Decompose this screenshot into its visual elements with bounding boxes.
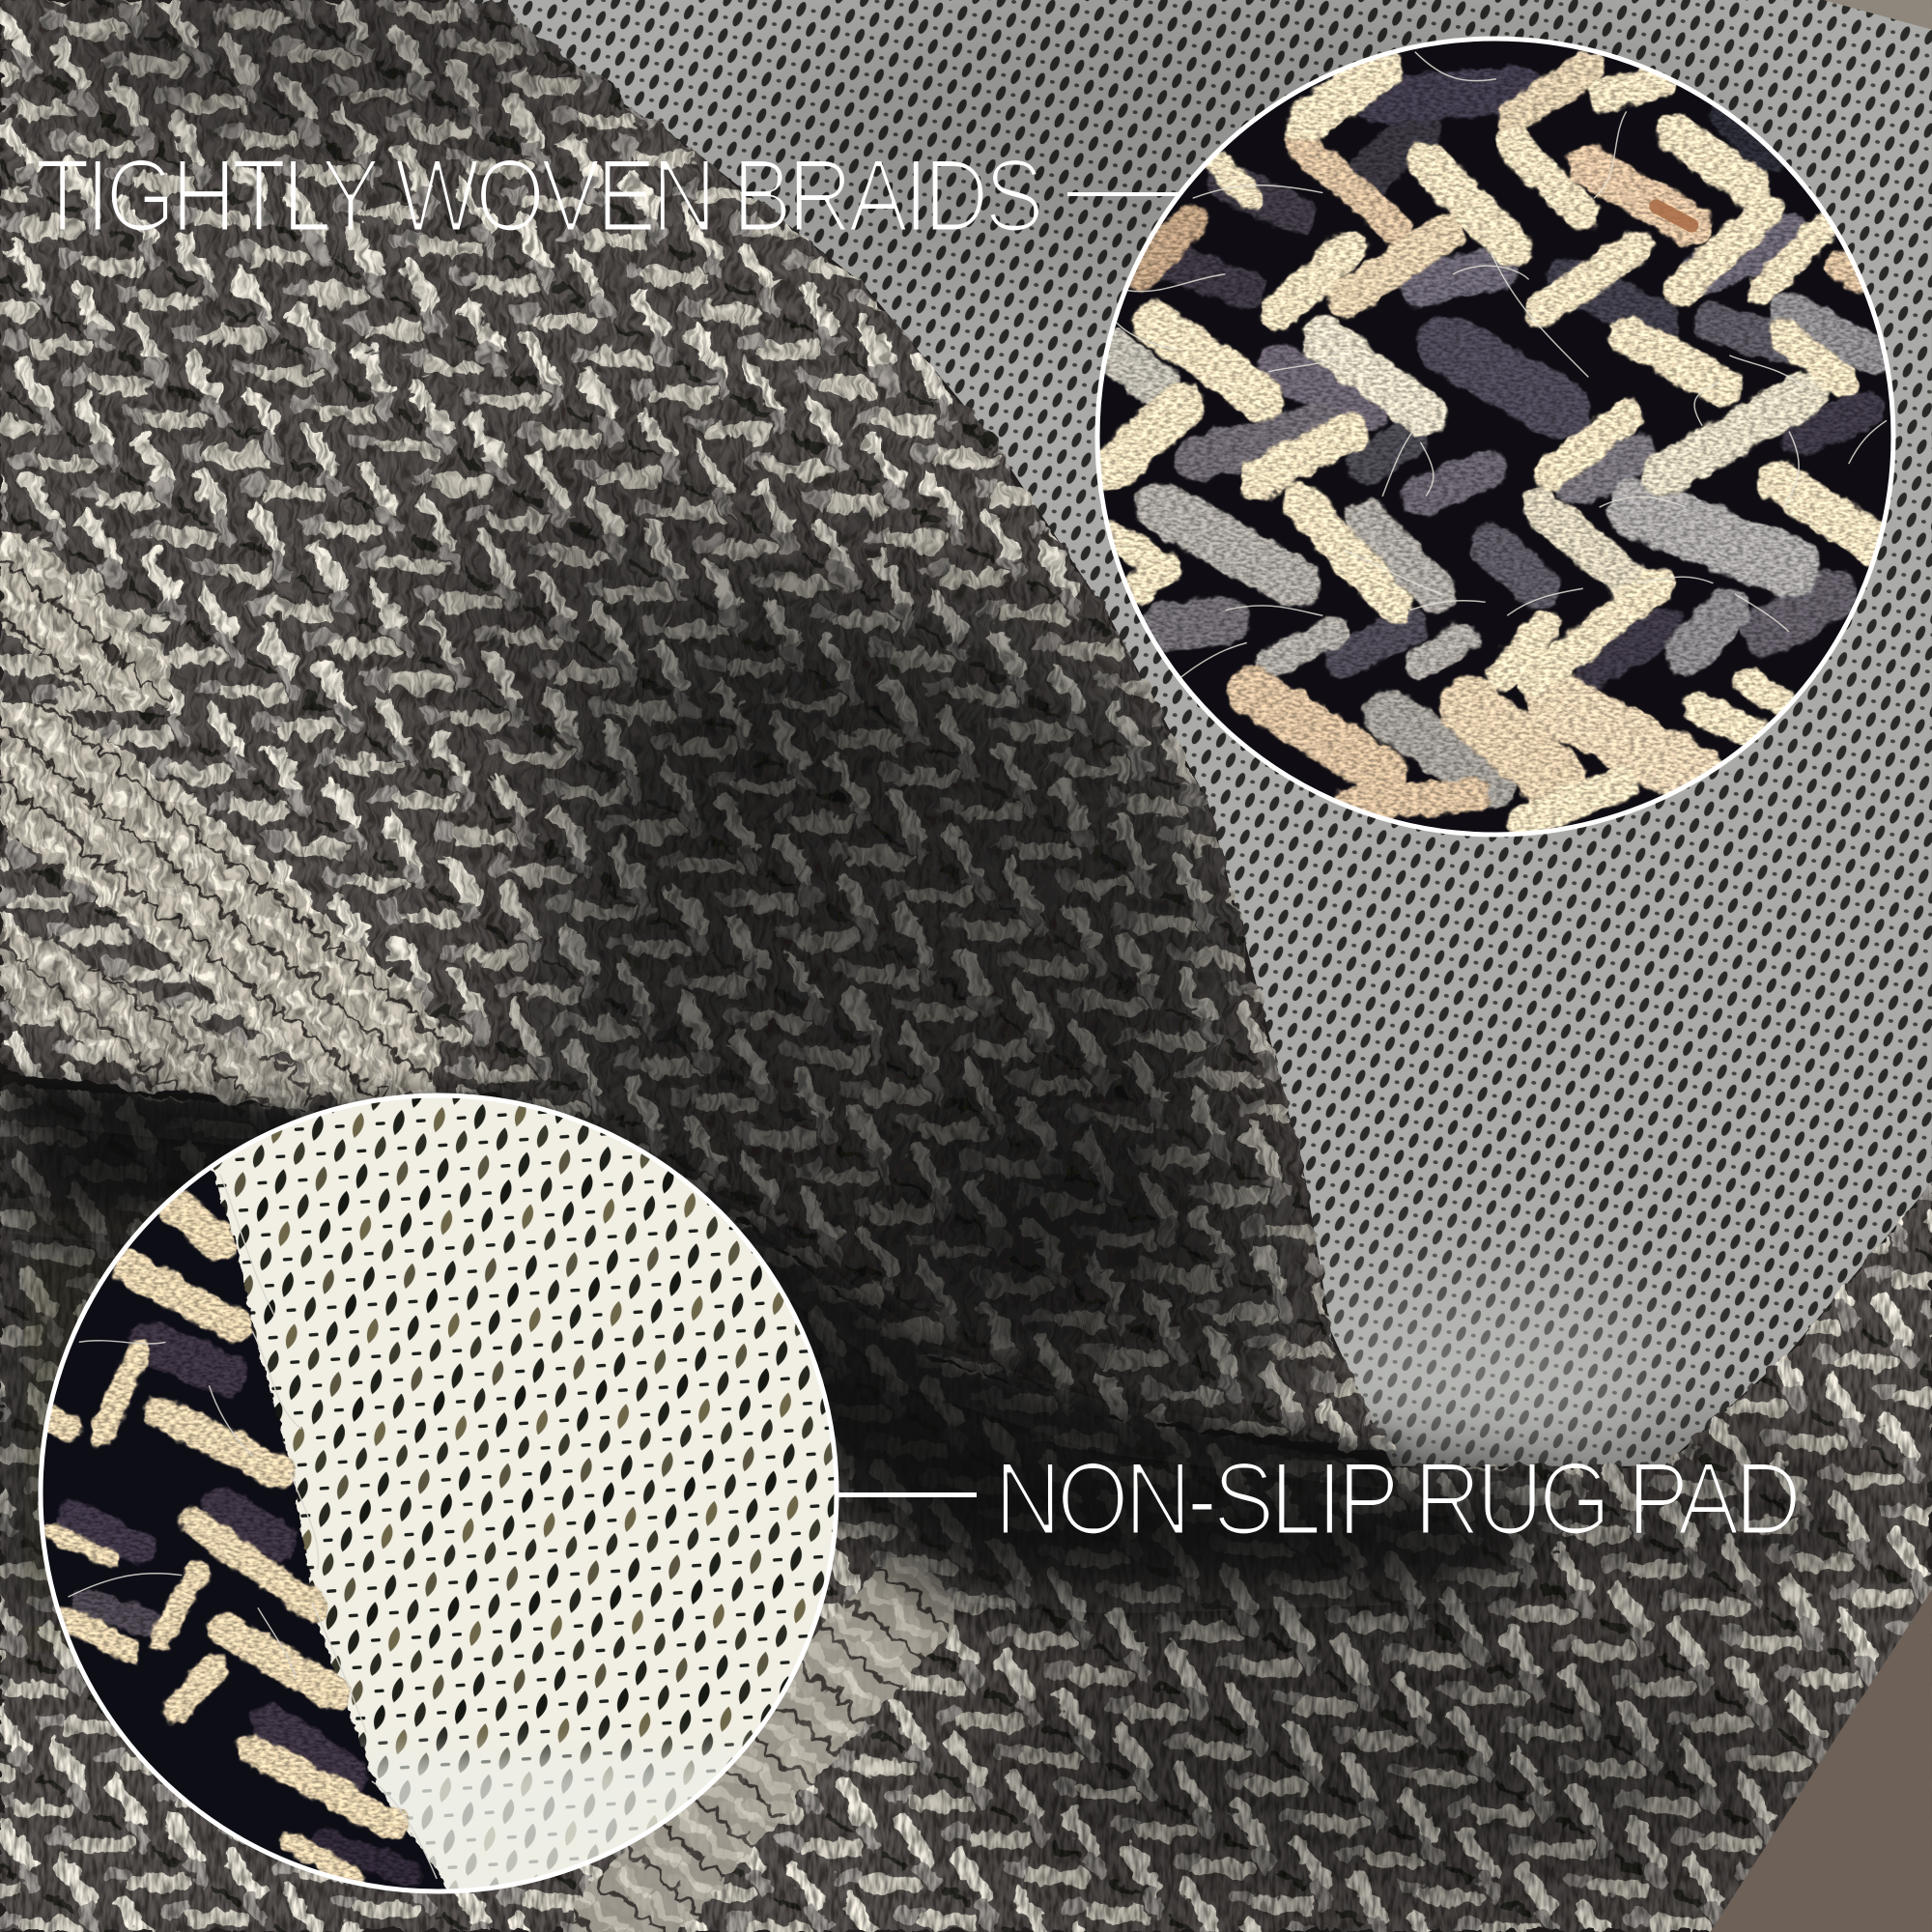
stray fibres: [1117, 52, 1887, 681]
cream strands: [1112, 69, 1876, 822]
corner of floor at top right: [1824, 0, 1932, 30]
lower rug, flat on the floor: [0, 1084, 1932, 1932]
mesh of the pad: [19, 1082, 869, 1932]
cream border band of lower rug: [591, 1577, 936, 1932]
soft fade on the roll's lower edge: [0, 1096, 1392, 1466]
wood floor at bottom right: [1710, 1589, 1932, 1932]
leader line to braid detail: [1067, 192, 1183, 196]
magnified circle: braid weave: [1097, 39, 1893, 835]
pad mesh surface: [469, 0, 1932, 1466]
shading on the roll: [529, 591, 1244, 1380]
callout: tightly woven braids: [35, 137, 1183, 253]
rust tip on strand: [1657, 207, 1691, 225]
dark and grey strands: [1112, 90, 1870, 783]
leader line to pad detail: [838, 1492, 977, 1497]
callout: non-slip rug pad: [838, 1440, 1799, 1556]
rolled rug body: [0, 0, 1397, 1453]
heading: tightly woven braids: TIGHTLY WOVEN BRAIDS: [35, 137, 1040, 253]
white ring: [1097, 39, 1893, 835]
braid along left edge: [19, 1082, 453, 1932]
deep shadow under the roll: [0, 1084, 1602, 1614]
white ring: [41, 1095, 837, 1891]
heading: non-slip rug pad: NON-SLIP RUG PAD: [994, 1440, 1799, 1556]
fraying fibres at braid edge: [69, 1174, 437, 1879]
magnified circle: pad mesh and braid edge: [19, 1082, 869, 1932]
cream stripes: [0, 542, 160, 702]
